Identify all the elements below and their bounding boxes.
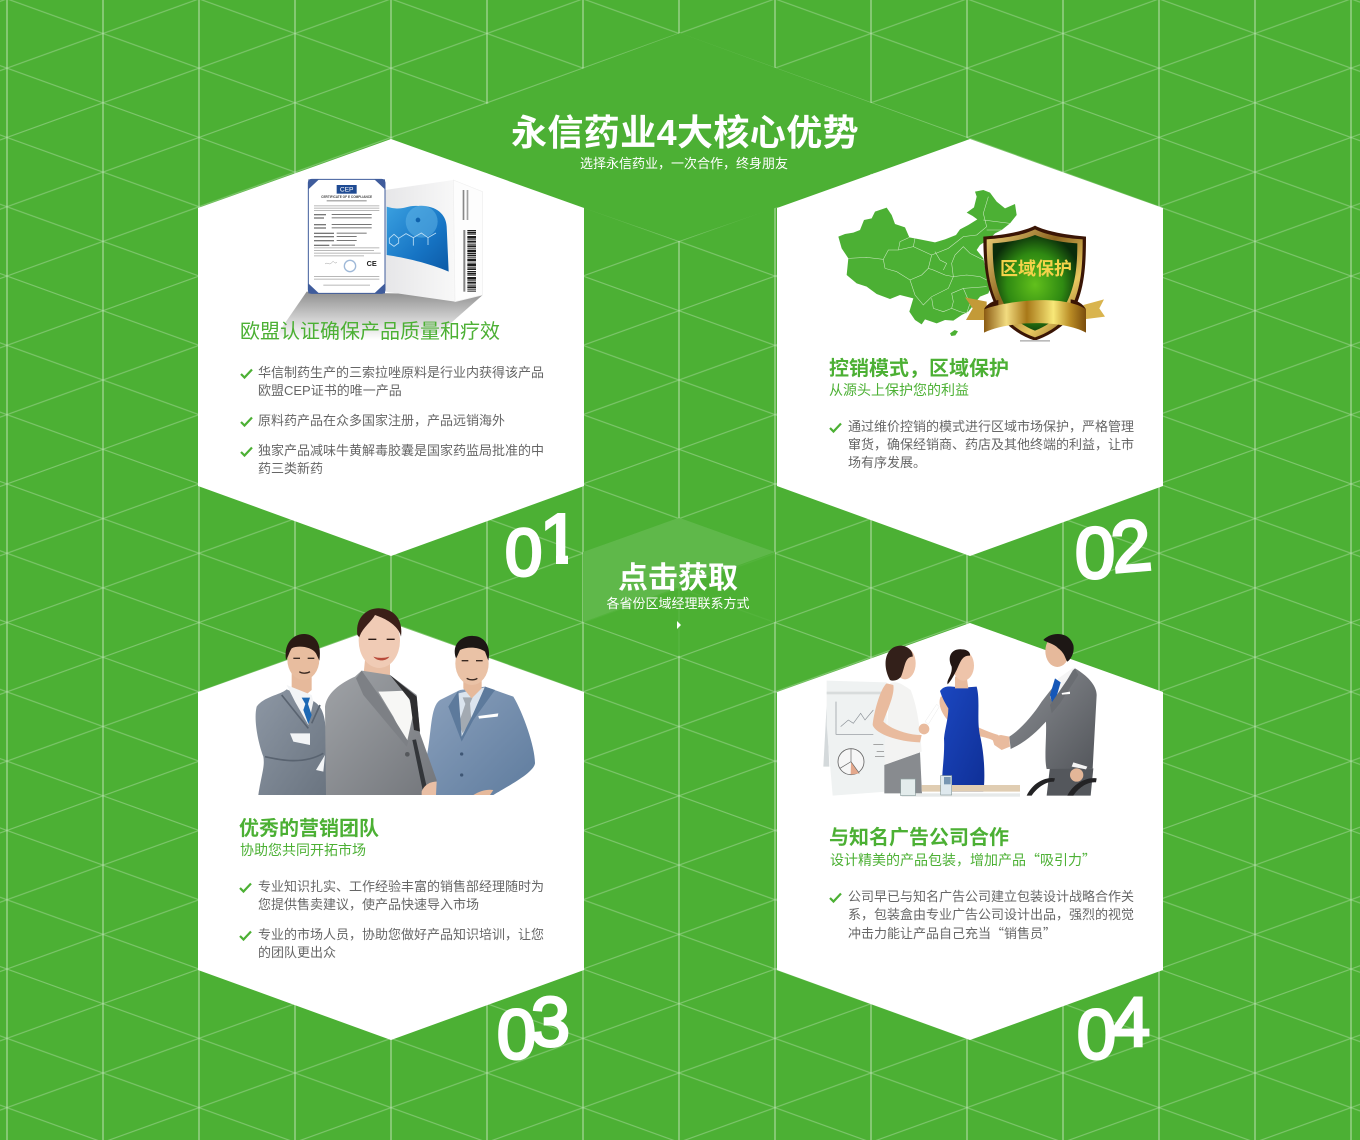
bullet 1 [240,365,544,398]
bullet 3 [240,443,544,476]
image: China map with shield badge [838,190,1105,342]
number 04 [1077,983,1150,1074]
number 02: 0 [1075,514,1115,594]
image: certificate and product box: CE [367,259,377,268]
bullet 3: 药三类新药 [258,461,323,476]
bullet [829,419,1134,470]
bullet 2: 专业的市场人员，协助您做好产品知识培训，让您 [258,927,544,942]
number 01 [505,513,568,590]
hexagon background [777,139,1163,556]
bullet 2 [239,927,544,960]
bullet 2: 的团队更出众 [258,945,336,960]
icon: small arrow [677,621,681,629]
bullet [829,889,1134,942]
number 03 [497,983,570,1074]
bullet: 公司早已与知名广告公司建立包装设计战略合作关 [848,889,1134,904]
call to action subheading: 各省份区域经理联系方式 [606,596,750,611]
image: three team members [256,608,535,795]
bullet: 通过维价控销的模式进行区域市场保护，严格管理 [848,419,1134,434]
call to action: centre hexagon [583,518,775,656]
hexagon background [777,623,1163,1040]
heading: 控销模式，区域保护 [829,358,1009,380]
panel: 04 advertising partners [777,623,1163,1074]
number 03: 0 [497,996,536,1074]
hexagon background [198,139,584,556]
number 04: 4 [1111,983,1150,1061]
subheading: 设计精美的产品包装，增加产品“吸引力” [830,850,1096,870]
bullet 3: 独家产品减味牛黄解毒胶囊是国家药监局批准的中 [258,443,544,458]
bullet: 系，包装盒由专业广告公司设计出品，强烈的视觉 [848,907,1134,922]
panel: 03 marketing team [198,608,584,1074]
image: certificate and product box: CERTIFICATE OF E COMPLIANCE [321,195,372,199]
bullet 1: 您提供售卖建议，使产品快速导入市场 [258,897,479,912]
call to action heading: 点击获取 [618,562,738,595]
subheading: 从源头上保护您的利益 [829,382,969,398]
number 01: 0 [505,516,542,590]
subtitle: 选择永信药业，一次合作，终身朋友 [580,156,788,171]
panel: 01 EU certification [198,139,584,590]
title: 永信药业4大核心优势 [511,112,859,153]
number 03: 3 [531,983,570,1061]
bullet 1: 华信制药生产的三索拉唑原料是行业内获得该产品 [258,365,544,380]
image: certificate and product box: CEP [340,187,354,194]
heading: 欧盟认证确保产品质量和疗效 [240,321,500,343]
image: China map with shield badge: 区域保护 [1000,259,1072,279]
heading: 与知名广告公司合作 [829,827,1009,849]
bullet: 场有序发展。 [848,455,926,470]
bullet: 窜货，确保经销商、药店及其他终端的利益，让市 [848,437,1134,452]
bullet: 冲击力能让产品自己充当“销售员” [848,923,1056,942]
number 02 [1075,505,1155,594]
number 01: 1 [540,500,579,578]
bullet 1: 欧盟CEP证书的唯一产品 [258,383,402,398]
heading: 优秀的营销团队 [239,818,379,840]
bullet 1: 专业知识扎实、工作经验丰富的销售部经理随时为 [258,879,544,894]
image: business handshake by flip chart [823,634,1097,796]
panel: 02 regional protection [777,139,1163,594]
number 02: 2 [1108,505,1155,588]
bullet 2: 原料药产品在众多国家注册，产品远销海外 [258,413,505,428]
hexagon background [198,626,584,1040]
bullet 1 [239,879,544,912]
number 04: 0 [1077,996,1116,1074]
subheading: 协助您共同开拓市场 [240,842,366,858]
image: certificate and product box [277,178,483,336]
hexagon shape [583,518,775,656]
